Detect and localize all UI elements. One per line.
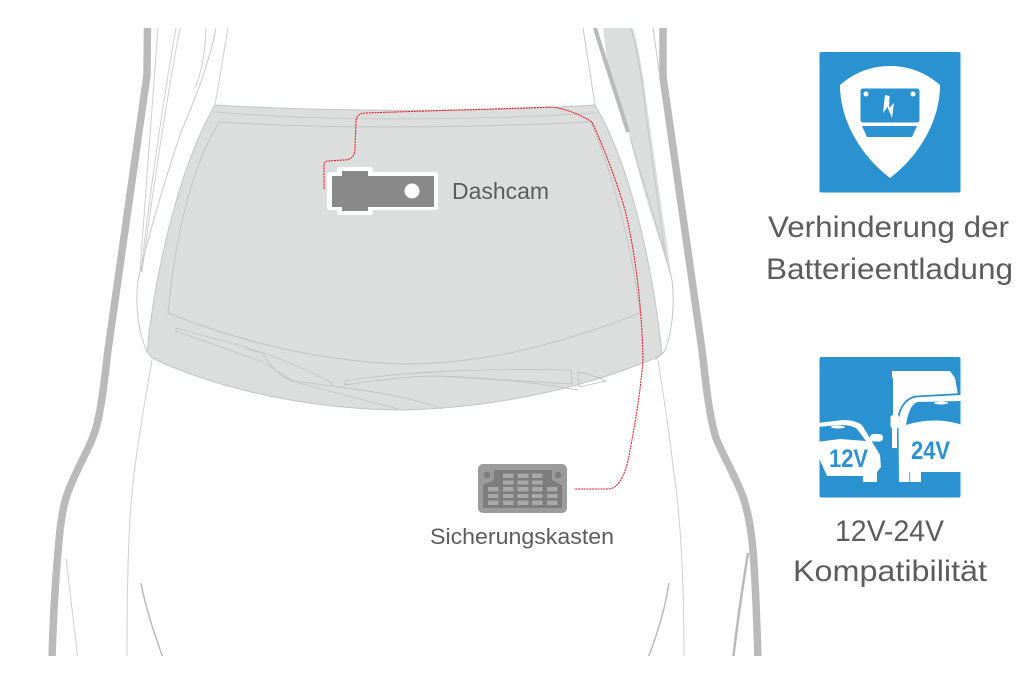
car illustration (52, 20, 758, 660)
right A-pillar panel (603, 28, 672, 280)
caption: battery discharge prevention (766, 211, 1013, 286)
12V label: 12V (829, 445, 868, 473)
fuse box icon (478, 464, 567, 513)
caption: battery discharge prevention: Batterieentladung (766, 253, 1013, 286)
caption: 12V-24V compatibility (793, 515, 988, 588)
right pillar details (631, 28, 666, 260)
truck (890, 371, 962, 482)
caption: 12V-24V compatibility: 12V-24V (835, 515, 944, 548)
left car outline (52, 20, 148, 660)
lower hood lines (127, 360, 152, 660)
label: Dashcam: Dashcam (452, 178, 549, 204)
left pillar lines (140, 28, 158, 270)
24V label: 24V (911, 437, 950, 465)
icon: battery shield (820, 52, 960, 192)
dashcam icon (327, 167, 438, 215)
right car outline (663, 20, 758, 660)
wipers (176, 328, 606, 409)
red cable (324, 107, 643, 489)
windshield inner lines (215, 112, 597, 119)
caption: 12V-24V compatibility: Kompatibilität (793, 555, 988, 588)
car (817, 420, 883, 482)
icon: 12V and 24V vehicles (817, 357, 962, 498)
windshield (147, 105, 662, 410)
caption: battery discharge prevention: Verhinderung der (768, 211, 1009, 244)
label: Sicherungskasten: Sicherungskasten (430, 524, 614, 549)
